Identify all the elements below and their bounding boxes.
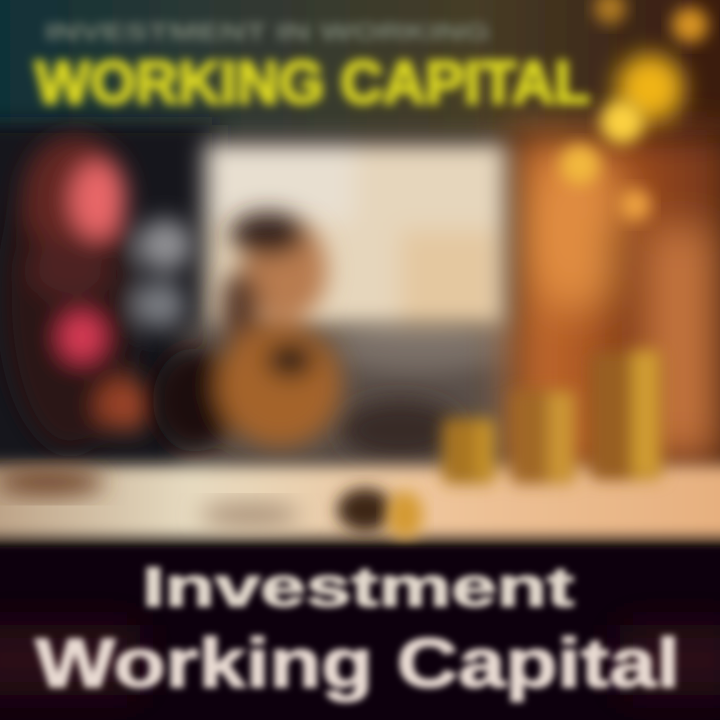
panel: warm right background <box>510 130 720 480</box>
heading: working capital: Working Capital <box>35 624 680 702</box>
person: centre figure <box>153 212 342 452</box>
panel: whiteboard <box>205 142 507 328</box>
person: left presenter <box>4 135 193 450</box>
chart: coin stacks <box>442 350 662 484</box>
glowing lights <box>560 0 708 221</box>
top small heading: INVESTMENT IN WORKING <box>45 19 490 46</box>
panel: bottom dark band <box>0 547 720 720</box>
title: yellow working capital: WORKING CAPITAL <box>35 49 590 116</box>
heading: investment: Investment <box>142 555 574 618</box>
panel: table <box>0 465 720 539</box>
